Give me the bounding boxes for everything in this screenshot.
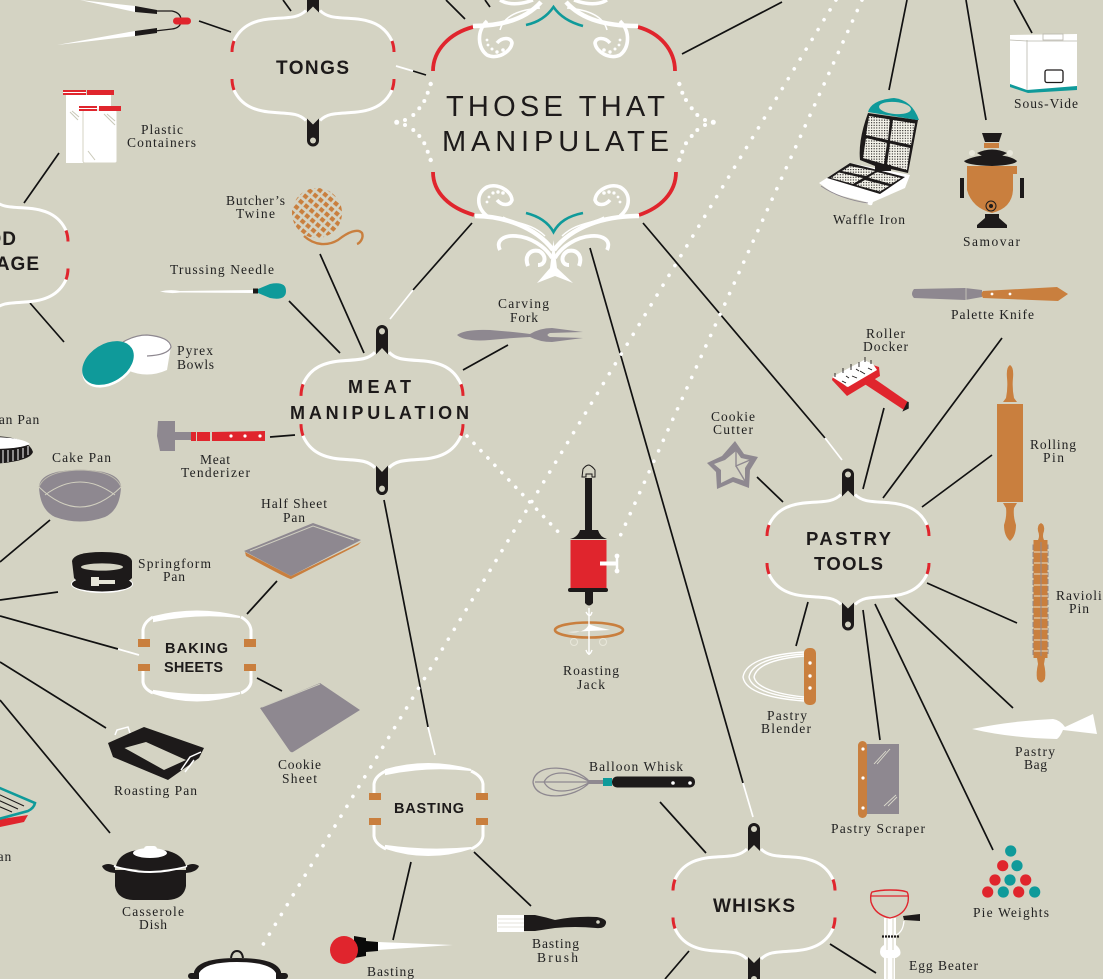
label: Roller Docker: Roller (866, 326, 906, 341)
label: Casserole Dish (122, 904, 184, 932)
icon: butcher's twine (292, 188, 363, 244)
icon: pie weights (982, 845, 1040, 898)
label: Pyrex Bowls: Bowls (177, 357, 214, 372)
label: Plastic Containers (127, 122, 196, 150)
icon: casserole dish (102, 846, 199, 900)
label: Ravioli Pin: Ravioli (1056, 588, 1103, 603)
label: Waffle Iron: Waffle Iron (833, 212, 905, 227)
label: Pastry Blender (761, 708, 812, 736)
label: Basting Brush (532, 936, 579, 965)
icon: samovar (960, 133, 1024, 228)
label: Pie Weights: Pie Weights (973, 905, 1049, 920)
frame: Tongs (232, 0, 394, 146)
icon: egg beater (871, 890, 920, 979)
frame: Baking Sheets: BAKING (165, 641, 228, 657)
frame: Pastry Tools: PASTRY (806, 528, 892, 549)
frame: Pastry Tools: TOOLS (814, 553, 883, 574)
icon: pyrex bowls (74, 332, 171, 397)
icon: pastry blender (743, 648, 816, 705)
label: Carving Fork (498, 296, 549, 325)
label: Springform Pan: Springform (138, 556, 211, 571)
icon: cake pan (39, 470, 121, 522)
frame: Baking Sheets: SHEETS (164, 660, 223, 676)
right ornaments (554, 0, 639, 266)
label: Meat Tenderizer: Meat (200, 452, 230, 467)
label: Butcher's Twine: Butcher’s (226, 193, 285, 208)
icon: half sheet pan (244, 523, 361, 579)
title (442, 91, 669, 158)
label: Ravioli Pin: Pin (1069, 601, 1089, 616)
icon: pastry bag (972, 714, 1097, 739)
label: Ravioli Pin (1056, 588, 1103, 616)
label: Pastry Blender: Pastry (767, 708, 807, 723)
label: Sous-Vide: Sous-Vide (1014, 96, 1078, 111)
icon: carving fork (457, 328, 583, 342)
label: Rolling Pin: Pin (1043, 450, 1064, 465)
label: Cookie Cutter: Cutter (713, 422, 754, 437)
label: Carving Fork: Carving (498, 296, 549, 311)
label: Rolling Pin: Rolling (1030, 437, 1076, 452)
icon: basting bulb (330, 936, 453, 964)
icon: meat tenderizer (157, 421, 265, 451)
label: Casserole Dish: Dish (139, 917, 167, 932)
frame: Basting (369, 764, 488, 855)
icon: plastic containers (63, 90, 121, 163)
label: Butcher's Twine: Twine (236, 206, 275, 221)
icon: roasting pan (108, 727, 204, 780)
label: Egg Beater: Egg Beater (909, 958, 978, 973)
frame: Whisks (673, 823, 835, 979)
label: Rolling Pin (1030, 437, 1076, 465)
icon: springform pan (71, 552, 133, 593)
frame: Pastry Tools (767, 468, 929, 630)
label: Roller Docker: Docker (863, 339, 908, 354)
label: Plastic Containers: Plastic (141, 122, 183, 137)
label: Pyrex Bowls (177, 343, 214, 372)
icon: flan pan (0, 436, 33, 464)
label: Half Sheet Pan: Half Sheet (261, 496, 327, 511)
label: Cookie Cutter (711, 409, 755, 437)
label: Pastry Scraper: Pastry Scraper (831, 821, 926, 836)
icon: slow cooker (188, 951, 288, 979)
frame: Whisks: WHISKS (713, 896, 795, 917)
label: Roasting Jack (563, 663, 619, 692)
icon: sous-vide (1010, 34, 1077, 93)
label: Meat Tenderizer (181, 452, 250, 480)
frame: Basting: BASTING (394, 801, 464, 817)
label: Pastry Bag: Pastry (1015, 744, 1055, 759)
icon: waffle iron (819, 98, 919, 205)
frame: Baking Sheets (138, 612, 256, 700)
label: Carving Fork: Fork (510, 310, 538, 325)
label: Pastry Blender: Blender (761, 721, 812, 736)
frame: Meat Manipulation (290, 325, 469, 495)
label: Cookie Sheet: Cookie (278, 757, 321, 772)
frame: Meat Manipulation: MANIPULATION (290, 403, 469, 423)
left ornaments (473, 0, 553, 266)
label: Half Sheet Pan: Pan (283, 510, 305, 525)
main frame: Those That Manipulate (394, 0, 716, 283)
label: Roasting Jack: Jack (577, 677, 605, 692)
icon: cookie sheet (260, 683, 360, 752)
label: Cake Pan: Cake Pan (52, 450, 111, 465)
label: Basting Brush: Basting (532, 936, 579, 951)
frame: Food Storage (0, 200, 68, 310)
label: Roller Docker (863, 326, 908, 354)
title: THOSE THAT (446, 91, 665, 123)
frame: Meat Manipulation: MEAT (348, 377, 411, 397)
label: Meat Tenderizer: Tenderizer (181, 465, 250, 480)
label: Butcher's Twine (226, 193, 285, 221)
icon: cookie cutter (707, 441, 758, 489)
label: Basting: Basting (367, 964, 414, 979)
label: Samovar: Samovar (963, 234, 1020, 249)
label: Pastry Bag: Bag (1024, 757, 1047, 772)
label: Half Sheet Pan (261, 496, 327, 525)
icon: palette knife (912, 287, 1068, 301)
label: Roasting Jack: Roasting (563, 663, 619, 678)
icon: grill pan (0, 786, 35, 828)
icon: pastry scraper (858, 741, 899, 818)
icon: balloon whisk (533, 768, 695, 796)
label: Springform Pan: Pan (163, 569, 185, 584)
icon: basting brush (497, 915, 606, 932)
label: Cookie Sheet: Sheet (282, 771, 317, 786)
label: Cookie Cutter: Cookie (711, 409, 755, 424)
icon: rolling pin (997, 365, 1023, 541)
label: Pyrex Bowls: Pyrex (177, 343, 213, 358)
label: Balloon Whisk: Balloon Whisk (589, 759, 683, 774)
icon: trussing needle (160, 283, 286, 299)
label: Roasting Pan: Roasting Pan (114, 783, 197, 798)
label: Pastry Bag (1015, 744, 1055, 772)
label: Palette Knife: Palette Knife (951, 307, 1034, 322)
label: Trussing Needle: Trussing Needle (170, 262, 274, 277)
label: Springform Pan (138, 556, 211, 584)
dotted lines (261, 0, 862, 948)
icon: roasting jack (555, 465, 623, 655)
label: Plastic Containers: Containers (127, 135, 196, 150)
icon: roller docker (832, 357, 908, 410)
icon: ravioli pin (1033, 523, 1048, 682)
label: Casserole Dish: Casserole (122, 904, 184, 919)
title: MANIPULATE (442, 126, 669, 158)
frame: Tongs: TONGS (276, 58, 349, 79)
label: Cookie Sheet (278, 757, 321, 786)
icon: tongs (57, 0, 191, 45)
label: Basting Brush: Brush (537, 950, 578, 965)
